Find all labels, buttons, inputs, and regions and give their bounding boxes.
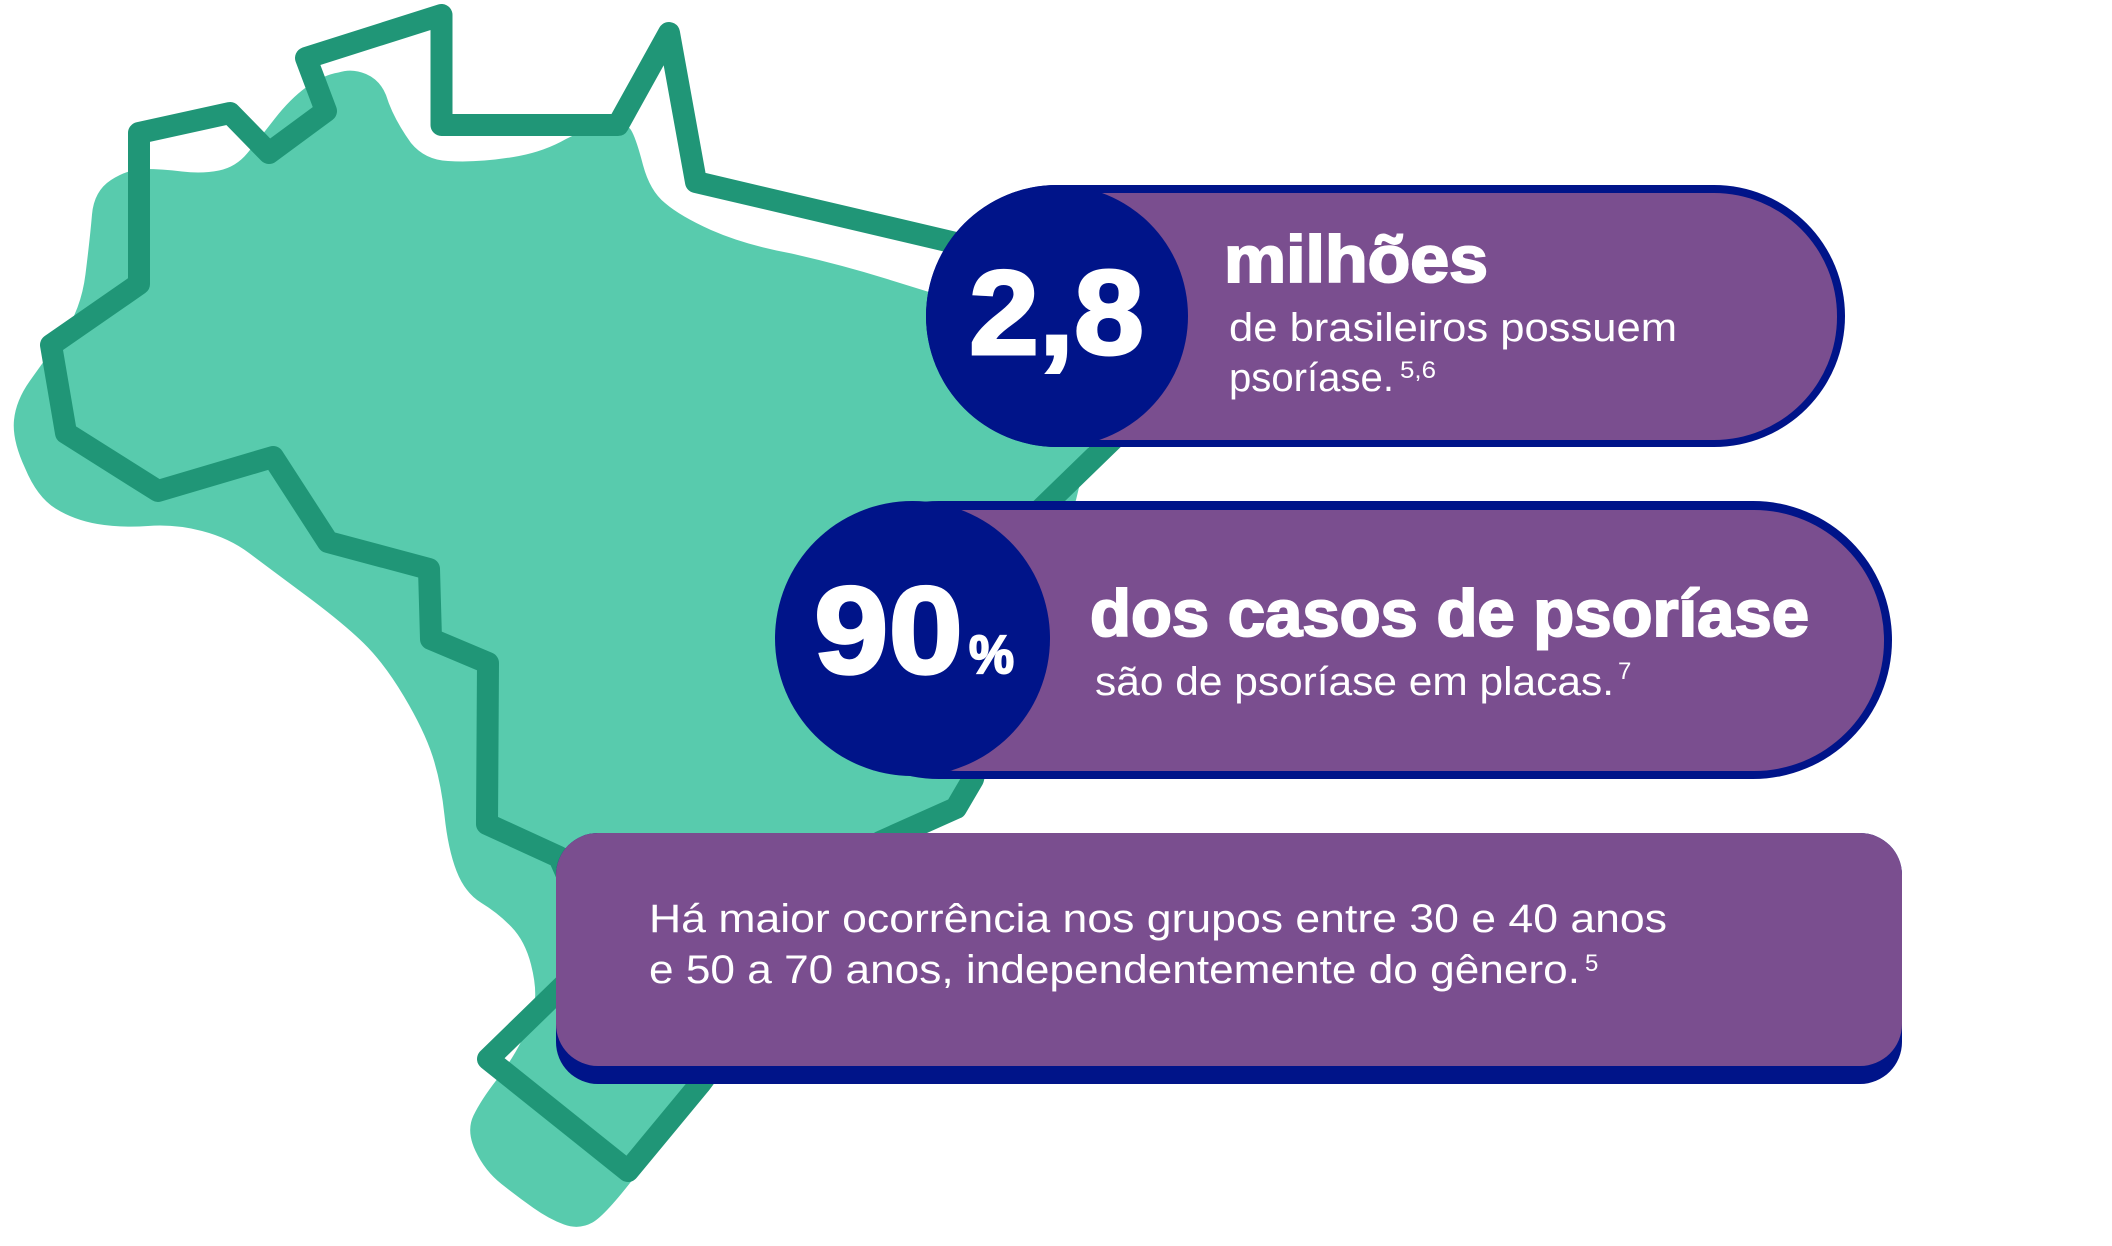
footnote reference 7: 7 [1618, 658, 1631, 685]
body text line 1: de brasileiros possuem [1229, 306, 1677, 350]
pill border [926, 185, 1845, 447]
panel: age groups callout [556, 833, 1902, 1084]
map fill shape [14, 71, 1100, 1227]
body text line 2: psoríase. [1229, 356, 1394, 400]
callout text line 1: Há maior ocorrência nos grupos entre 30 e 40 anos [649, 897, 1667, 941]
number 90: 90 [814, 562, 963, 700]
callout shadow [556, 833, 1902, 1084]
number 2,8: 2,8 [969, 246, 1144, 380]
number circle [775, 501, 1050, 776]
number circle [926, 185, 1188, 447]
footnote reference 5: 5 [1585, 950, 1598, 977]
panel: 90% [775, 501, 1892, 779]
heading: milhões: milhões [1224, 222, 1488, 296]
pill fill [960, 193, 1837, 440]
map outline [51, 15, 1245, 1171]
callout text line 2: e 50 a 70 anos, independentemente do gênero. [649, 948, 1580, 992]
callout body [556, 833, 1902, 1066]
body text: são de psoríase em placas. [1095, 660, 1614, 704]
pill border [800, 501, 1892, 779]
pill fill [830, 510, 1884, 771]
footnote reference 5,6: 5,6 [1400, 357, 1436, 384]
map of Brazil [14, 15, 1245, 1227]
panel: 2,8 milhões [926, 185, 1845, 447]
heading: dos casos de psoríase: dos casos de psoríase [1090, 576, 1809, 650]
percent sign: % [969, 625, 1014, 685]
